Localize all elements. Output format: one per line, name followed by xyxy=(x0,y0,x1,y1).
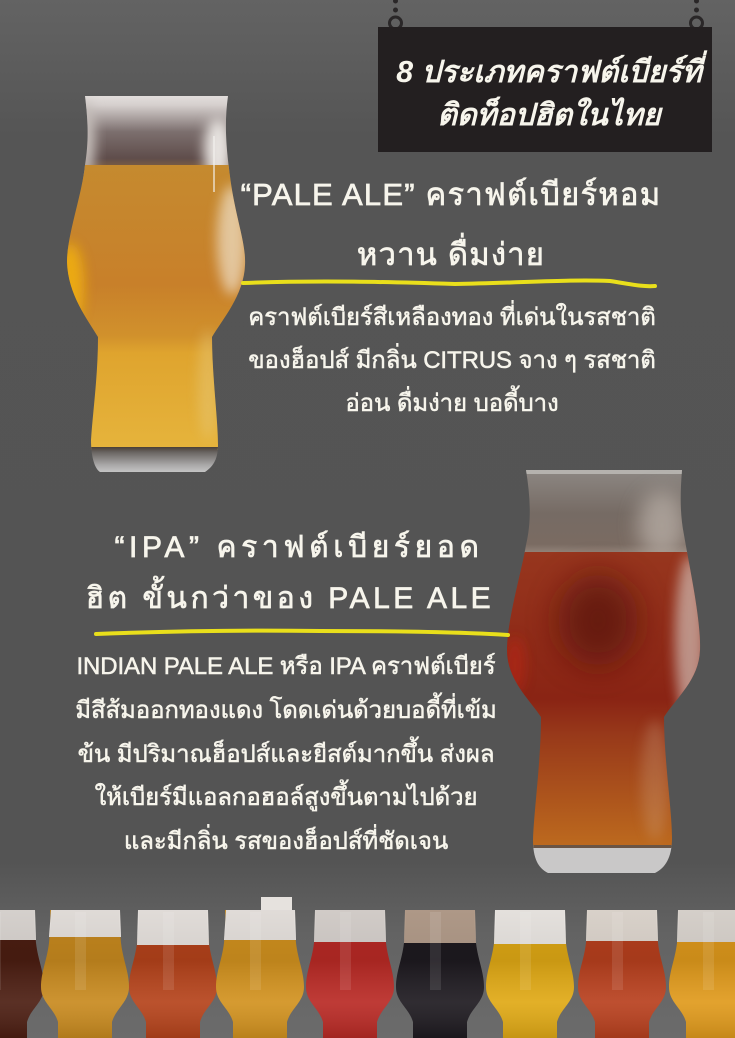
text: IPA description: INDIAN PALE ALE หรือ IPA คราฟต์เบียร์ xyxy=(76,653,496,680)
text: IPA description: มีสีส้มออกทองแดง โดดเด่นด้วยบอดี้ที่เข้ม xyxy=(75,697,497,724)
glass: red xyxy=(306,910,394,1038)
text: IPA description: ให้เบียร์มีแอลกอฮอล์สูงขึ้นตามไปด้วย xyxy=(95,784,477,811)
text: IPA description xyxy=(75,652,497,855)
text: pale ale description: ของฮ็อปส์ มีกลิ่น CITRUS จาง ๆ รสชาติ xyxy=(248,347,656,374)
yellow underline two xyxy=(96,631,508,635)
sign board xyxy=(378,27,712,152)
glass: gold xyxy=(216,897,304,1038)
hanging hooks xyxy=(390,0,702,29)
icon: IPA glass xyxy=(500,465,705,875)
text: IPA description: และมีกลิ่น รสของฮ็อปส์ที่ชัดเจน xyxy=(124,828,448,855)
heading: pale ale: “PALE ALE” คราฟต์เบียร์หอม xyxy=(241,177,661,212)
glass: copper xyxy=(129,910,217,1038)
glass: stout xyxy=(396,910,484,1038)
title: 8 ประเภทคราฟต์เบียร์ที่ xyxy=(396,56,702,89)
text: pale ale description: อ่อน ดื่มง่าย บอดี้บาง xyxy=(345,390,559,417)
heading: pale ale: หวาน ดื่มง่าย xyxy=(357,237,545,272)
text: pale ale description xyxy=(248,300,656,417)
text: IPA description: ข้น มีปริมาณฮ็อปส์และยีสต์มากขึ้น ส่งผล xyxy=(78,741,494,768)
icon: pale ale glass xyxy=(67,96,246,472)
heading: IPA: “IPA” คราฟต์เบียร์ยอด xyxy=(114,531,484,564)
heading: IPA: ฮิต ขั้นกว่าของ PALE ALE xyxy=(86,582,494,615)
heading: IPA xyxy=(86,530,494,615)
glass: amber xyxy=(41,910,129,1038)
glass: golden ale xyxy=(669,910,735,1038)
title: ติดท็อปฮิตในไทย xyxy=(437,99,661,132)
text: pale ale description: คราฟต์เบียร์สีเหลืองทอง ที่เด่นในรสชาติ xyxy=(248,304,656,331)
glass: lager xyxy=(486,910,574,1038)
glass: orange red xyxy=(578,910,666,1038)
heading: pale ale xyxy=(241,177,661,272)
title xyxy=(396,50,708,132)
row of beer glasses xyxy=(0,897,735,1038)
yellow underline one xyxy=(243,280,655,286)
glass: dark brown xyxy=(0,910,44,1038)
